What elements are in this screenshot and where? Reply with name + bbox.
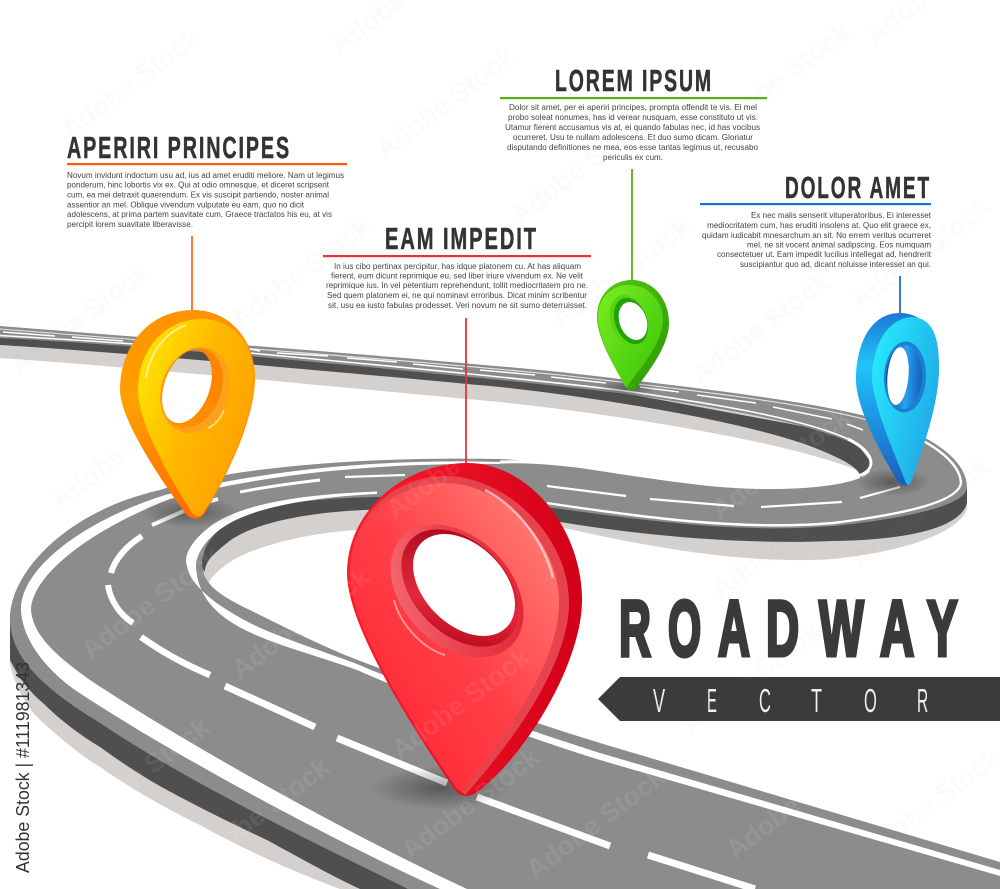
- watermark: Adobe Stock: [676, 616, 826, 740]
- body text: [67, 170, 344, 229]
- body text: percipit lorem suavitate liberavisse.: [67, 219, 193, 229]
- watermark: Adobe Stock: [706, 481, 856, 605]
- body text: [326, 261, 588, 310]
- watermark: Adobe Stock: [371, 41, 521, 165]
- title: roadway: Y: [927, 585, 958, 673]
- watermark: Adobe Stock: [686, 266, 836, 390]
- body text: ocurreret. Usu te nullam adolescens. Et duo sumo dicam. Gloriatur: [513, 132, 753, 142]
- body text: sit, usu ea iusto fabulas prodesset. Veri novum ne sit sumo deterruisset.: [328, 300, 587, 310]
- roadway infographic: Adobe Stock: [66, 711, 216, 835]
- body text: assentior an mel. Oblique vivendum vulputate eu eam, quo no dicit: [67, 200, 305, 210]
- body text: ponderum, hinc lobortis vix ex. Qui at odio omnesque, et diceret scripserit: [67, 180, 330, 190]
- body text: quidam iudicabit mnesarchum an sit. No errem veritus ocurreret: [702, 230, 932, 240]
- road shadow: [0, 340, 967, 889]
- title: roadway: A: [718, 584, 750, 673]
- body text: Dolor sit amet, per ei aperiri principes, prompta offendit te vis. Ei mel: [509, 102, 757, 112]
- pin shadows: [140, 380, 931, 810]
- subtitle text: vector: R: [917, 684, 928, 720]
- roadway infographic: Adobe Stock: [386, 641, 536, 765]
- roadway infographic: Adobe Stock: [521, 761, 671, 885]
- subtitle text: vector: C: [759, 682, 771, 720]
- roadway infographic: Adobe Stock: [381, 401, 531, 525]
- body text: mel, ne sit vocent animal sadipscing. Eos numquam: [747, 240, 931, 250]
- stock id: Adobe Stock | #111981343: [13, 662, 33, 873]
- body text: Utamur fierent accusamus vis at, ei quando fabulas nec, id has vocibus: [505, 122, 760, 132]
- body text: mediocritatem cum, has eruditi insolens at. Quo elit graece ex,: [707, 220, 931, 230]
- body text: cum, ea mei detraxit quaerendum. Ex vis suscipit partiendo, noster animal: [67, 190, 329, 200]
- road edge lines: [0, 329, 961, 525]
- roadway infographic: Adobe Stock: [721, 741, 871, 865]
- pin: yellow: [120, 310, 255, 519]
- title: roadway: O: [668, 586, 701, 673]
- watermark: Adobe Stock: [846, 451, 996, 575]
- body text: periculis ex cum.: [603, 152, 663, 162]
- pin: red: [347, 463, 582, 796]
- body text: disputando definitiones ne mea, eos esse tantas legimus ut, recusabo: [507, 142, 758, 152]
- heading block: dolor amet: [700, 170, 932, 269]
- subtitle text: vector: E: [707, 684, 717, 720]
- heading block: eam impedit: [323, 221, 591, 310]
- pin: green: [597, 280, 669, 391]
- road side wall: [0, 336, 967, 889]
- roadway infographic: Adobe Stock: [396, 741, 546, 865]
- watermark: Adobe Stock: [46, 391, 196, 515]
- body text: [505, 102, 760, 162]
- heading block: aperiri principes: APERIRI PRINCIPES: [67, 130, 291, 165]
- connector lines: [192, 169, 900, 465]
- roadway infographic: Adobe Stock: [226, 561, 376, 685]
- body text: probo soleat nonumes, has id verear nusquam, esse constituto ut vis.: [508, 112, 758, 122]
- body text: Ex nec malis senserit vituperatoribus. Ei interesset: [751, 210, 932, 220]
- heading block: eam impedit: EAM IMPEDIT: [385, 221, 538, 256]
- watermark: Adobe Stock: [56, 21, 206, 145]
- body text: In ius cibo pertinax percipitur, has idque platonem cu. At has aliquam: [334, 261, 581, 271]
- title: roadway: D: [766, 585, 799, 673]
- roadway infographic: Adobe Stock: [76, 541, 226, 665]
- watermark: Adobe Stock: [226, 211, 376, 335]
- subtitle text: vector: O: [864, 682, 877, 720]
- title: roadway: R: [619, 584, 651, 673]
- pin: blue: [856, 313, 939, 485]
- road: [0, 326, 1000, 889]
- body text: reprimique ius. In vel petentium reprehendunt, tollit mediocritatem pro ne.: [326, 280, 588, 290]
- outer left edge line: [21, 461, 500, 889]
- watermark: Adobe Stock: [706, 16, 856, 140]
- roadway infographic: Adobe Stock: [706, 401, 856, 525]
- roadway infographic: Adobe Stock: [186, 751, 336, 875]
- title: roadway: [619, 584, 958, 673]
- body text: [702, 210, 932, 269]
- body text: Sed quem platonem ei, ne qui nominavi erroribus. Dicat minim scribentur: [327, 290, 587, 300]
- body text: Novum invidunt indoctum usu ad, ius ad amet eruditi meliore. Nam ut legimus: [67, 170, 344, 180]
- inner left edge line: [186, 492, 1000, 876]
- watermark: Adobe Stock: [6, 256, 156, 380]
- body text: suscipiantur quo ad, dicant noluisse interesset an qui.: [740, 259, 931, 269]
- body text: adolescens, at prima partem suavitate cum. Graece tractatos his eu, at vis: [67, 209, 332, 219]
- subtitle banner: [598, 677, 1000, 721]
- road surface: [0, 326, 1000, 889]
- watermark: Adobe Stock: [546, 211, 696, 335]
- heading block: aperiri principes: [67, 130, 347, 229]
- heading block: lorem ipsum: [500, 63, 767, 162]
- subtitle text: vector: [653, 682, 928, 720]
- body text: consectetuer ut. Eam impedit lucilius intellegat ad, hendrerit: [717, 249, 932, 259]
- watermark: Adobe Stock: [506, 106, 656, 230]
- subtitle text: vector: T: [811, 682, 822, 719]
- title: roadway: A: [880, 584, 914, 672]
- watermark: Adobe Stock: [846, 191, 996, 315]
- body text: fierent, eum dicunt reprimique eu, sed liber iriure vivendum ex. Ne velit: [331, 270, 584, 280]
- subtitle text: vector: V: [653, 682, 665, 719]
- title: roadway: W: [819, 584, 864, 672]
- road centre dashes: [3, 332, 915, 889]
- heading block: lorem ipsum: LOREM IPSUM: [555, 63, 713, 98]
